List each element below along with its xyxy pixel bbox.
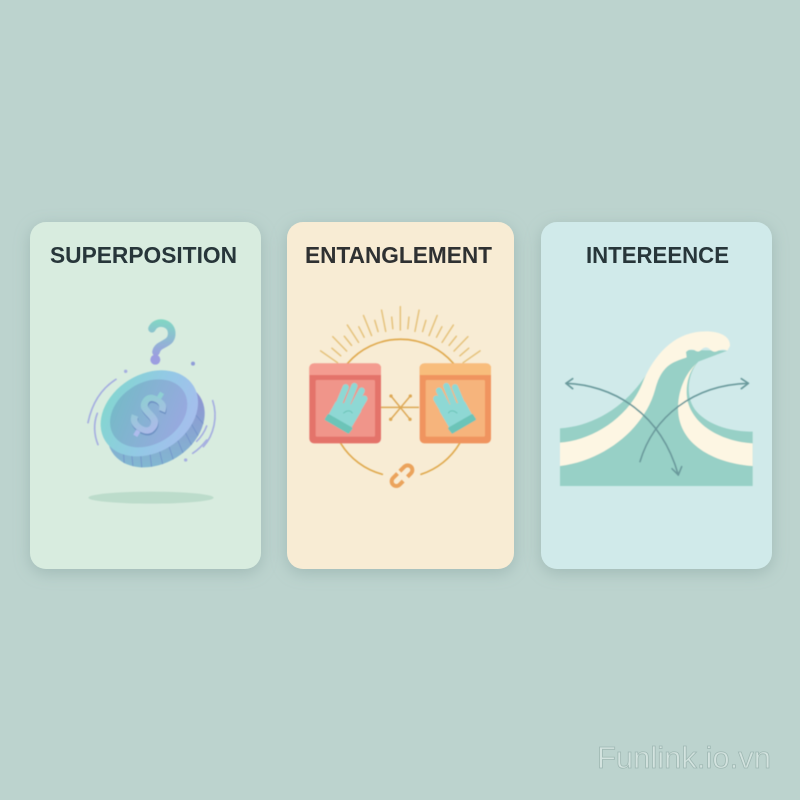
left glove (326, 386, 364, 433)
panel: entanglement (287, 222, 514, 569)
right glove (436, 386, 475, 433)
heading: entanglement: ENTANGLEMENT (305, 242, 492, 268)
chain link (390, 463, 414, 488)
motion lines and dots (88, 362, 215, 462)
coin: S (119, 380, 178, 448)
coin (100, 370, 206, 468)
wave body (560, 350, 753, 486)
wave foam right (678, 363, 753, 466)
entanglement star connector (381, 394, 419, 421)
coin shadow (88, 492, 214, 504)
wave foam left and crest (560, 331, 730, 466)
coin: S (120, 382, 179, 450)
icon: spinning coin with question mark (85, 323, 221, 504)
sun rays (321, 307, 480, 363)
connecting circle (341, 339, 460, 474)
left box (309, 363, 381, 443)
heading: superposition: SUPERPOSITION (50, 242, 237, 268)
interference arrows (566, 379, 748, 475)
right box (420, 363, 491, 443)
heading: interference: INTEREENCE (586, 242, 729, 268)
question mark (150, 323, 172, 365)
panel: interference (541, 222, 772, 569)
panel: superposition (30, 222, 261, 569)
icon: entangled gloves in boxes (309, 307, 491, 488)
icon: wave with crossing arrows (560, 331, 753, 486)
watermark: Funlink.io.vn (597, 740, 771, 775)
